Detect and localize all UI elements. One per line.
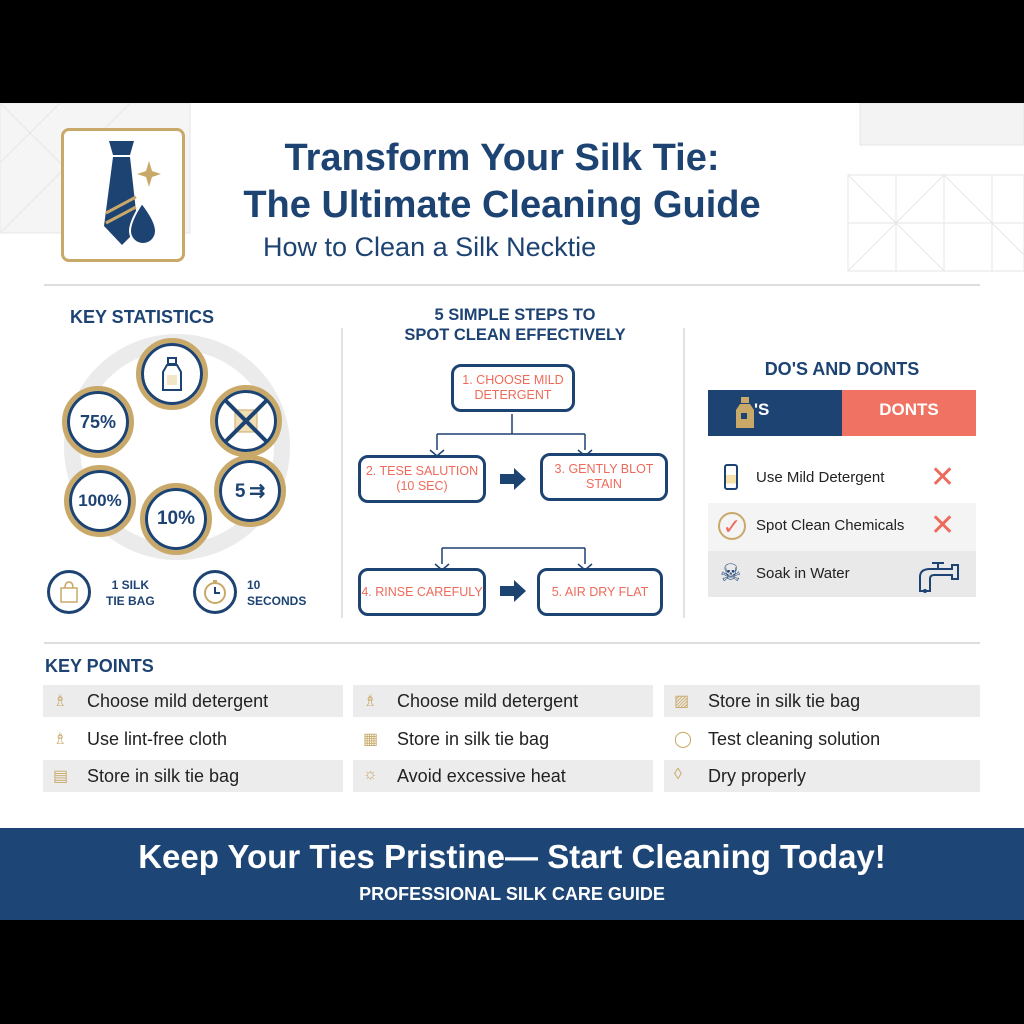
stat text bag: 1 SILK xyxy=(112,578,149,592)
header do's xyxy=(708,390,842,436)
step 3: 3. GENTLY BLOT xyxy=(555,462,653,476)
step 1 xyxy=(451,364,575,412)
stat icon bottle xyxy=(136,338,208,410)
panel: key points: Avoid excessive heat xyxy=(397,766,566,786)
row 1: Use Mild Detergent xyxy=(756,469,884,486)
heading: KEY POINTS xyxy=(45,656,154,676)
row 2: Spot Clean Chemicals xyxy=(756,517,904,534)
stat 5 icon: 5 ⇉ xyxy=(235,480,265,502)
panel: key points: ▨ xyxy=(674,693,689,710)
panel: key points: Use lint-free cloth xyxy=(87,728,227,748)
step 5 xyxy=(537,568,663,616)
panel: key points: ♗ xyxy=(53,731,67,748)
row 1: ✕ xyxy=(930,461,955,494)
panel: key points: Store in silk tie bag xyxy=(708,690,860,710)
stat 10% xyxy=(140,483,212,555)
footer banner xyxy=(0,828,1024,920)
step 3 xyxy=(540,453,668,501)
point items xyxy=(43,685,343,717)
stat no-soak icon xyxy=(210,385,282,457)
panel: key points xyxy=(43,656,980,792)
row 3: ☠ xyxy=(720,560,742,587)
panel: key points: Test cleaning solution xyxy=(708,728,880,748)
stat 100%: 100% xyxy=(78,491,122,510)
heading: KEY STATISTICS xyxy=(70,307,214,327)
heading: DO'S AND DONTS xyxy=(765,359,919,379)
main page xyxy=(0,103,1024,920)
step 4: 4. RINSE CAREFULY xyxy=(361,584,483,598)
panel: key statistics xyxy=(47,307,306,614)
stat 100% xyxy=(64,465,136,537)
heading: 5 SIMPLE STEPS TO xyxy=(434,306,596,324)
stat 10%: 10% xyxy=(157,508,195,529)
row 3 xyxy=(708,551,976,597)
stat text seconds xyxy=(247,578,306,608)
step 1: DETERGENT xyxy=(474,388,552,402)
panel: key points: ☼ xyxy=(363,766,378,783)
stat text seconds: 10 xyxy=(247,578,260,592)
panel: steps xyxy=(358,306,668,616)
title: The Ultimate Cleaning Guide xyxy=(243,184,761,226)
logo icon: tie with drop xyxy=(61,128,185,262)
panel: key points: Dry properly xyxy=(708,766,806,786)
stat text bag xyxy=(106,578,155,608)
step 1: 1. CHOOSE MILD xyxy=(462,373,564,387)
panel: key points: ♗ xyxy=(363,693,377,710)
step 3: STAIN xyxy=(586,477,622,491)
heading xyxy=(404,306,626,344)
row 2 xyxy=(708,503,976,551)
stat text bag: TIE BAG xyxy=(106,594,155,608)
stat 5 icon xyxy=(214,455,286,527)
panel: key points: ◊ xyxy=(674,766,682,783)
decorative pattern xyxy=(0,103,1024,272)
step 4 xyxy=(358,568,486,616)
step 2: (10 SEC) xyxy=(396,479,448,493)
header donts xyxy=(842,390,976,436)
row 2: ✕ xyxy=(930,509,955,542)
row 2: ✓ xyxy=(723,514,741,539)
header donts: DONTS xyxy=(879,400,939,419)
panel: key points: Choose mild detergent xyxy=(397,690,578,710)
stat text seconds: SECONDS xyxy=(247,594,306,608)
step 2 xyxy=(358,455,486,503)
heading: SPOT CLEAN EFFECTIVELY xyxy=(404,326,626,344)
arrows xyxy=(430,414,592,602)
footer subline: PROFESSIONAL SILK CARE GUIDE xyxy=(359,884,665,904)
stat 75%: 75% xyxy=(80,412,116,432)
header do's: 'S xyxy=(754,400,769,419)
step 2: 2. TESE SALUTION xyxy=(366,464,478,478)
step 5: 5. AIR DRY FLAT xyxy=(552,584,648,598)
panel: dos and donts xyxy=(708,359,976,597)
title: Transform Your Silk Tie: xyxy=(284,137,720,179)
point items: Choose mild detergent xyxy=(87,690,268,710)
row 3: Soak in Water xyxy=(756,565,850,582)
icon: bag xyxy=(47,570,91,614)
subtitle: How to Clean a Silk Necktie xyxy=(263,232,596,262)
panel: key points: ▦ xyxy=(363,731,378,748)
row 1 xyxy=(724,461,955,494)
title xyxy=(243,137,761,226)
point items: ♗ xyxy=(53,693,67,710)
panel: key points: Store in silk tie bag xyxy=(397,728,549,748)
panel: key points: Store in silk tie bag xyxy=(87,766,239,786)
panel: key points: ◯ xyxy=(674,731,692,748)
stat 75% xyxy=(62,386,134,458)
panel: key points: ▤ xyxy=(53,768,68,785)
footer headline: Keep Your Ties Pristine— Start Cleaning Today! xyxy=(138,838,886,875)
icon: stopwatch xyxy=(193,570,237,614)
